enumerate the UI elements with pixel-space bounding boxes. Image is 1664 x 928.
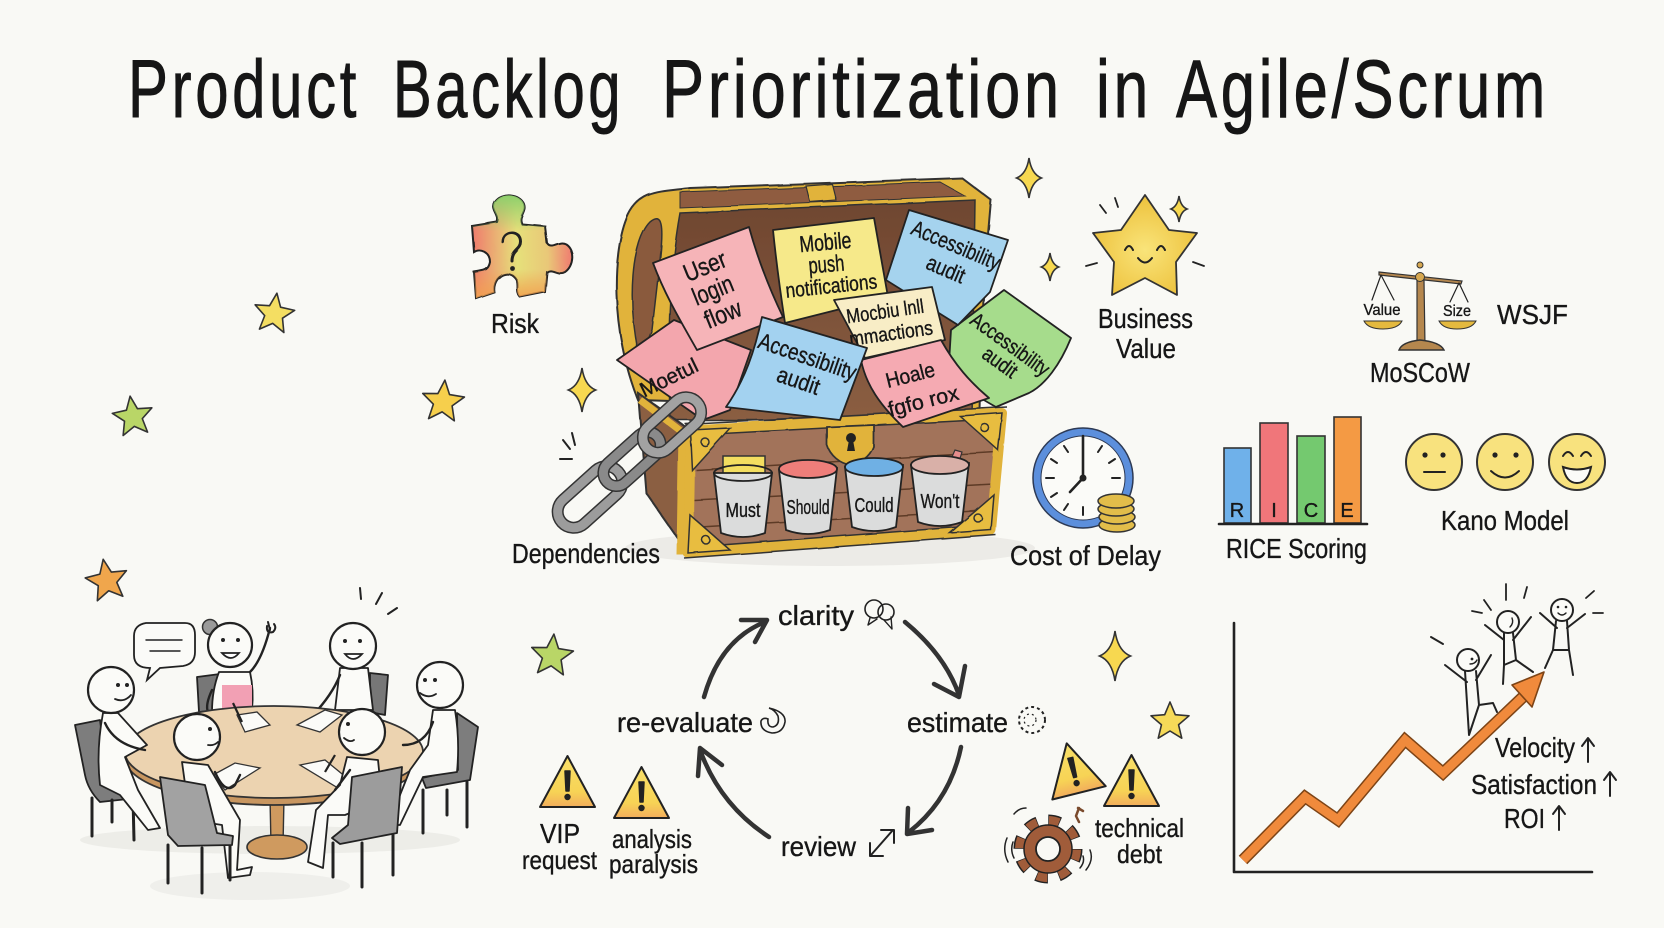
round table xyxy=(125,706,423,859)
panel: treasure chest with backlog notes xyxy=(616,178,1071,566)
callout: analysis paralysis warning: analysis xyxy=(612,824,692,854)
chart: RICE bars: E xyxy=(1340,500,1354,522)
bucket: Could: Could xyxy=(854,495,894,517)
trend arrow xyxy=(1243,672,1544,860)
callout: technical debt warnings and gear: technical xyxy=(1095,813,1184,843)
sticky note: blue centre: Accessibility xyxy=(755,328,860,385)
arrow: clarity to estimate xyxy=(905,622,965,697)
node: clarity xyxy=(778,600,894,631)
label: Business Value xyxy=(1098,303,1193,364)
sticky note: green: Accessibility xyxy=(966,308,1054,381)
chart: RICE bars: I xyxy=(1271,500,1277,522)
icon: smiling star (business value) xyxy=(1086,195,1204,295)
person: front right with chair xyxy=(308,709,402,887)
bucket: Should: Should xyxy=(786,497,830,519)
panel: refinement cycle xyxy=(617,600,1045,862)
sticky note: cream: Mocbiu lnll xyxy=(845,296,925,328)
bucket: Should xyxy=(779,460,837,534)
papers xyxy=(213,703,347,790)
person: excited top right xyxy=(313,588,397,715)
sticky note: pink right: fgfo rox xyxy=(886,382,962,422)
node: clarity: clarity xyxy=(778,600,854,631)
node: estimate: estimate xyxy=(907,707,1008,738)
callout: technical debt warnings and gear xyxy=(1005,737,1184,877)
sticky note: green xyxy=(949,290,1071,407)
MoSCoW buckets xyxy=(714,450,969,537)
label: WSJF: WSJF xyxy=(1497,299,1568,330)
icon: clock with coins (cost of delay) xyxy=(1033,428,1135,532)
sticky note: user login flow: User xyxy=(679,245,731,288)
callout: analysis paralysis warning: paralysis xyxy=(609,849,698,879)
icon: balance scale: Size xyxy=(1443,303,1471,320)
sticky note: blue centre xyxy=(726,317,867,420)
person C xyxy=(1540,591,1603,675)
title: Prioritization xyxy=(662,44,1063,135)
sticky note: yellow: push xyxy=(807,250,845,279)
person: raising hand xyxy=(197,620,275,722)
sticky note: yellow: Mobile xyxy=(798,227,852,257)
label: Kano Model: Kano Model xyxy=(1441,505,1569,536)
sticky note: pink right xyxy=(861,340,989,427)
sticky note: green: audit xyxy=(978,342,1022,383)
speech bubble xyxy=(134,623,195,680)
title: Backlog xyxy=(393,44,624,135)
floor shadow xyxy=(80,826,460,854)
decorative stars bottom centre xyxy=(530,631,1189,738)
node: review xyxy=(781,830,894,862)
bucket: Won't xyxy=(911,450,969,526)
sticky note: yellow: notifications xyxy=(784,270,878,303)
sticky note: pink left: Moetul xyxy=(636,354,702,402)
results: velocity, satisfaction, ROI: Velocity xyxy=(1495,732,1575,763)
sticky note: user login flow: flow xyxy=(700,294,747,335)
title xyxy=(128,44,1549,135)
chart: RICE bars: R xyxy=(1230,500,1244,522)
callout: technical debt warnings and gear: debt xyxy=(1117,839,1163,869)
label: Dependencies: Dependencies xyxy=(512,538,660,569)
chart: RICE bars: C xyxy=(1304,500,1318,522)
bucket: Could xyxy=(845,458,903,531)
icon: puzzle piece (risk) xyxy=(472,195,572,298)
chest body xyxy=(638,393,1007,558)
chest lid xyxy=(616,178,991,420)
sticky note: user login flow: login xyxy=(688,270,738,311)
sticky note: blue top right: audit xyxy=(923,250,969,288)
bucket: Must xyxy=(714,456,772,537)
bucket: Must: Must xyxy=(726,500,761,522)
chest floor shadow xyxy=(625,530,1035,566)
chart: RICE bars xyxy=(1219,417,1367,524)
person: front left with chair xyxy=(160,714,252,893)
callout: VIP request warning: VIP xyxy=(540,818,580,849)
sticky note: blue top right xyxy=(886,210,1008,325)
icon: balance scale xyxy=(1364,262,1476,350)
panel: growth chart xyxy=(1234,584,1616,872)
decorative stars left side xyxy=(83,290,466,602)
title: Product xyxy=(128,44,360,135)
icon: rusty gear xyxy=(1020,821,1076,877)
results: velocity, satisfaction, ROI: Satisfaction xyxy=(1471,769,1597,800)
node: review: review xyxy=(781,831,857,862)
person: right with chair xyxy=(388,662,478,833)
node: re-evaluate: re-evaluate xyxy=(617,707,753,738)
icon: chain (dependencies) xyxy=(551,391,707,534)
sticky note: user login flow xyxy=(653,227,783,350)
results: velocity, satisfaction, ROI: ROI xyxy=(1504,803,1545,834)
callout: VIP request warning xyxy=(522,756,598,875)
label: Risk: Risk xyxy=(491,308,540,339)
sticky note: pink left xyxy=(617,320,751,420)
label: Cost of Delay: Cost of Delay xyxy=(1010,540,1161,571)
sticky note: yellow xyxy=(773,218,888,323)
sticky note: cream: mmactions xyxy=(848,317,934,351)
label: RICE Scoring: RICE Scoring xyxy=(1226,533,1367,564)
arrow: re-evaluate to clarity xyxy=(704,620,767,697)
person A xyxy=(1431,637,1497,735)
results: velocity, satisfaction, ROI xyxy=(1471,732,1616,834)
sparkles around chest xyxy=(568,158,1059,412)
bucket: Won't: Won't xyxy=(920,491,960,513)
title: in xyxy=(1096,44,1152,135)
title: Agile/Scrum xyxy=(1176,44,1549,135)
sticky note: cream xyxy=(834,287,945,358)
panel: team meeting around table xyxy=(75,588,478,900)
label: MoSCoW: MoSCoW xyxy=(1370,357,1470,388)
icons: Kano faces xyxy=(1406,434,1605,490)
label: Business Value: Business xyxy=(1098,303,1193,334)
arrow: review to re-evaluate xyxy=(698,748,769,837)
callout: analysis paralysis warning xyxy=(609,767,698,879)
coin stack xyxy=(1098,494,1135,532)
person B xyxy=(1472,584,1533,684)
person: left with chair xyxy=(75,667,160,840)
sticky note: pink right: Hoale xyxy=(883,358,937,393)
sticky note: blue top right: Accessibility xyxy=(908,215,1004,275)
celebrating people xyxy=(1431,584,1603,735)
icon: balance scale: Value xyxy=(1364,302,1401,319)
face: delighted xyxy=(1549,434,1605,490)
sticky note: blue centre: audit xyxy=(774,361,824,400)
face: smile xyxy=(1477,434,1533,490)
label: Business Value: Value xyxy=(1116,333,1176,364)
lock xyxy=(827,425,874,465)
chart axes xyxy=(1234,623,1592,872)
arrow: estimate to review xyxy=(907,747,961,834)
face: neutral xyxy=(1406,434,1462,490)
callout: VIP request warning: request xyxy=(522,845,598,875)
